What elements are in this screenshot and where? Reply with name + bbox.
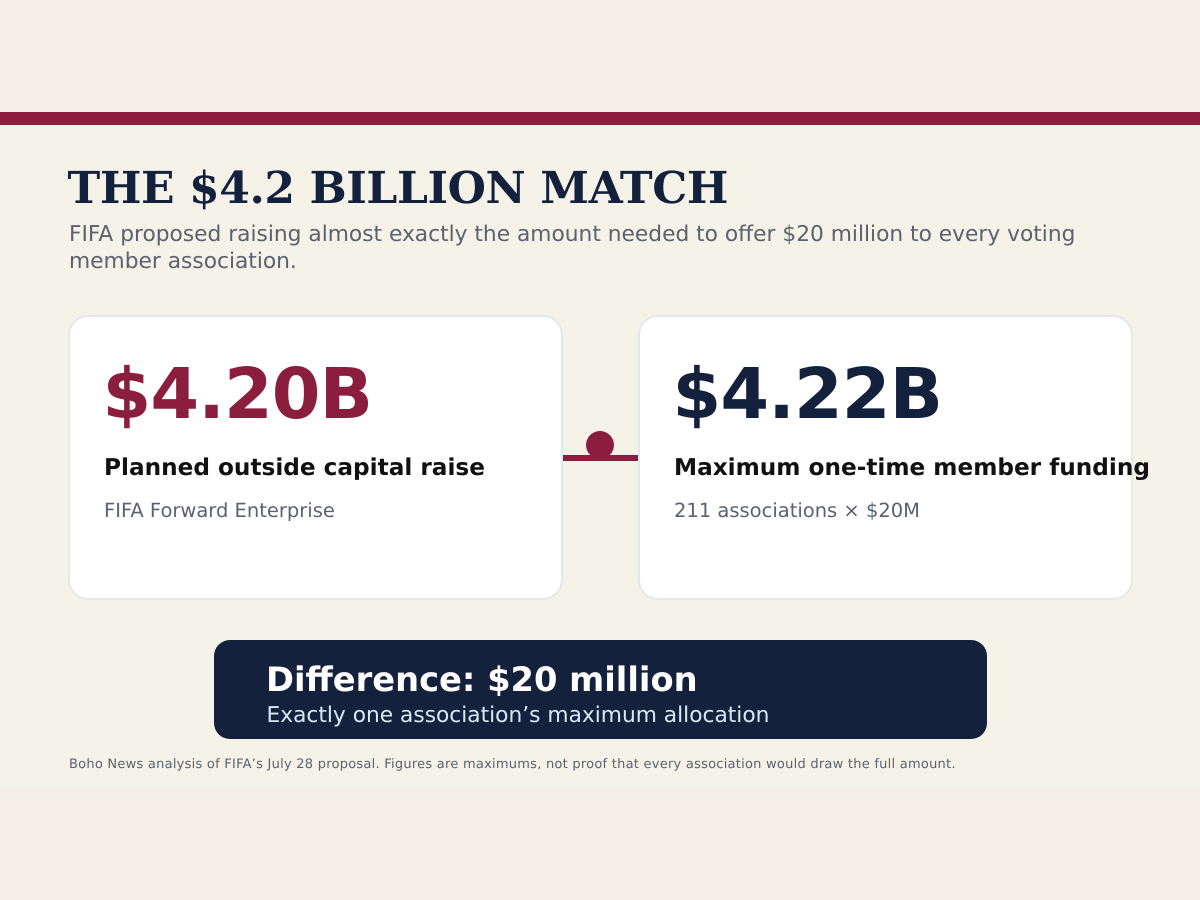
subtitle [69, 222, 1075, 274]
slide background [0, 112, 1200, 788]
member funding calculation: 211 associations × $20M [674, 499, 920, 522]
difference heading: Difference: $20 million [266, 660, 698, 699]
footnote: Boho News analysis of FIFA’s July 28 proposal. Figures are maximums, not proof that every association would draw the full amount. [69, 757, 956, 772]
top accent bar [0, 112, 1200, 125]
panel: outside capital raise [68, 315, 563, 600]
capital raise label: Planned outside capital raise [104, 454, 485, 481]
member funding label: Maximum one-time member funding [674, 454, 1150, 481]
panel: member funding [638, 315, 1133, 600]
callout: difference [214, 640, 987, 739]
connector between cards [563, 431, 638, 461]
subtitle: member association. [69, 249, 297, 274]
subtitle: FIFA proposed raising almost exactly the amount needed to offer $20 million to every voting [69, 222, 1075, 247]
member funding value: $4.22B [672, 353, 942, 435]
capital raise source: FIFA Forward Enterprise [104, 499, 335, 522]
capital raise value: $4.20B [102, 353, 372, 435]
title: THE $4.2 BILLION MATCH [68, 163, 728, 214]
difference note: Exactly one association’s maximum allocation [266, 703, 769, 728]
